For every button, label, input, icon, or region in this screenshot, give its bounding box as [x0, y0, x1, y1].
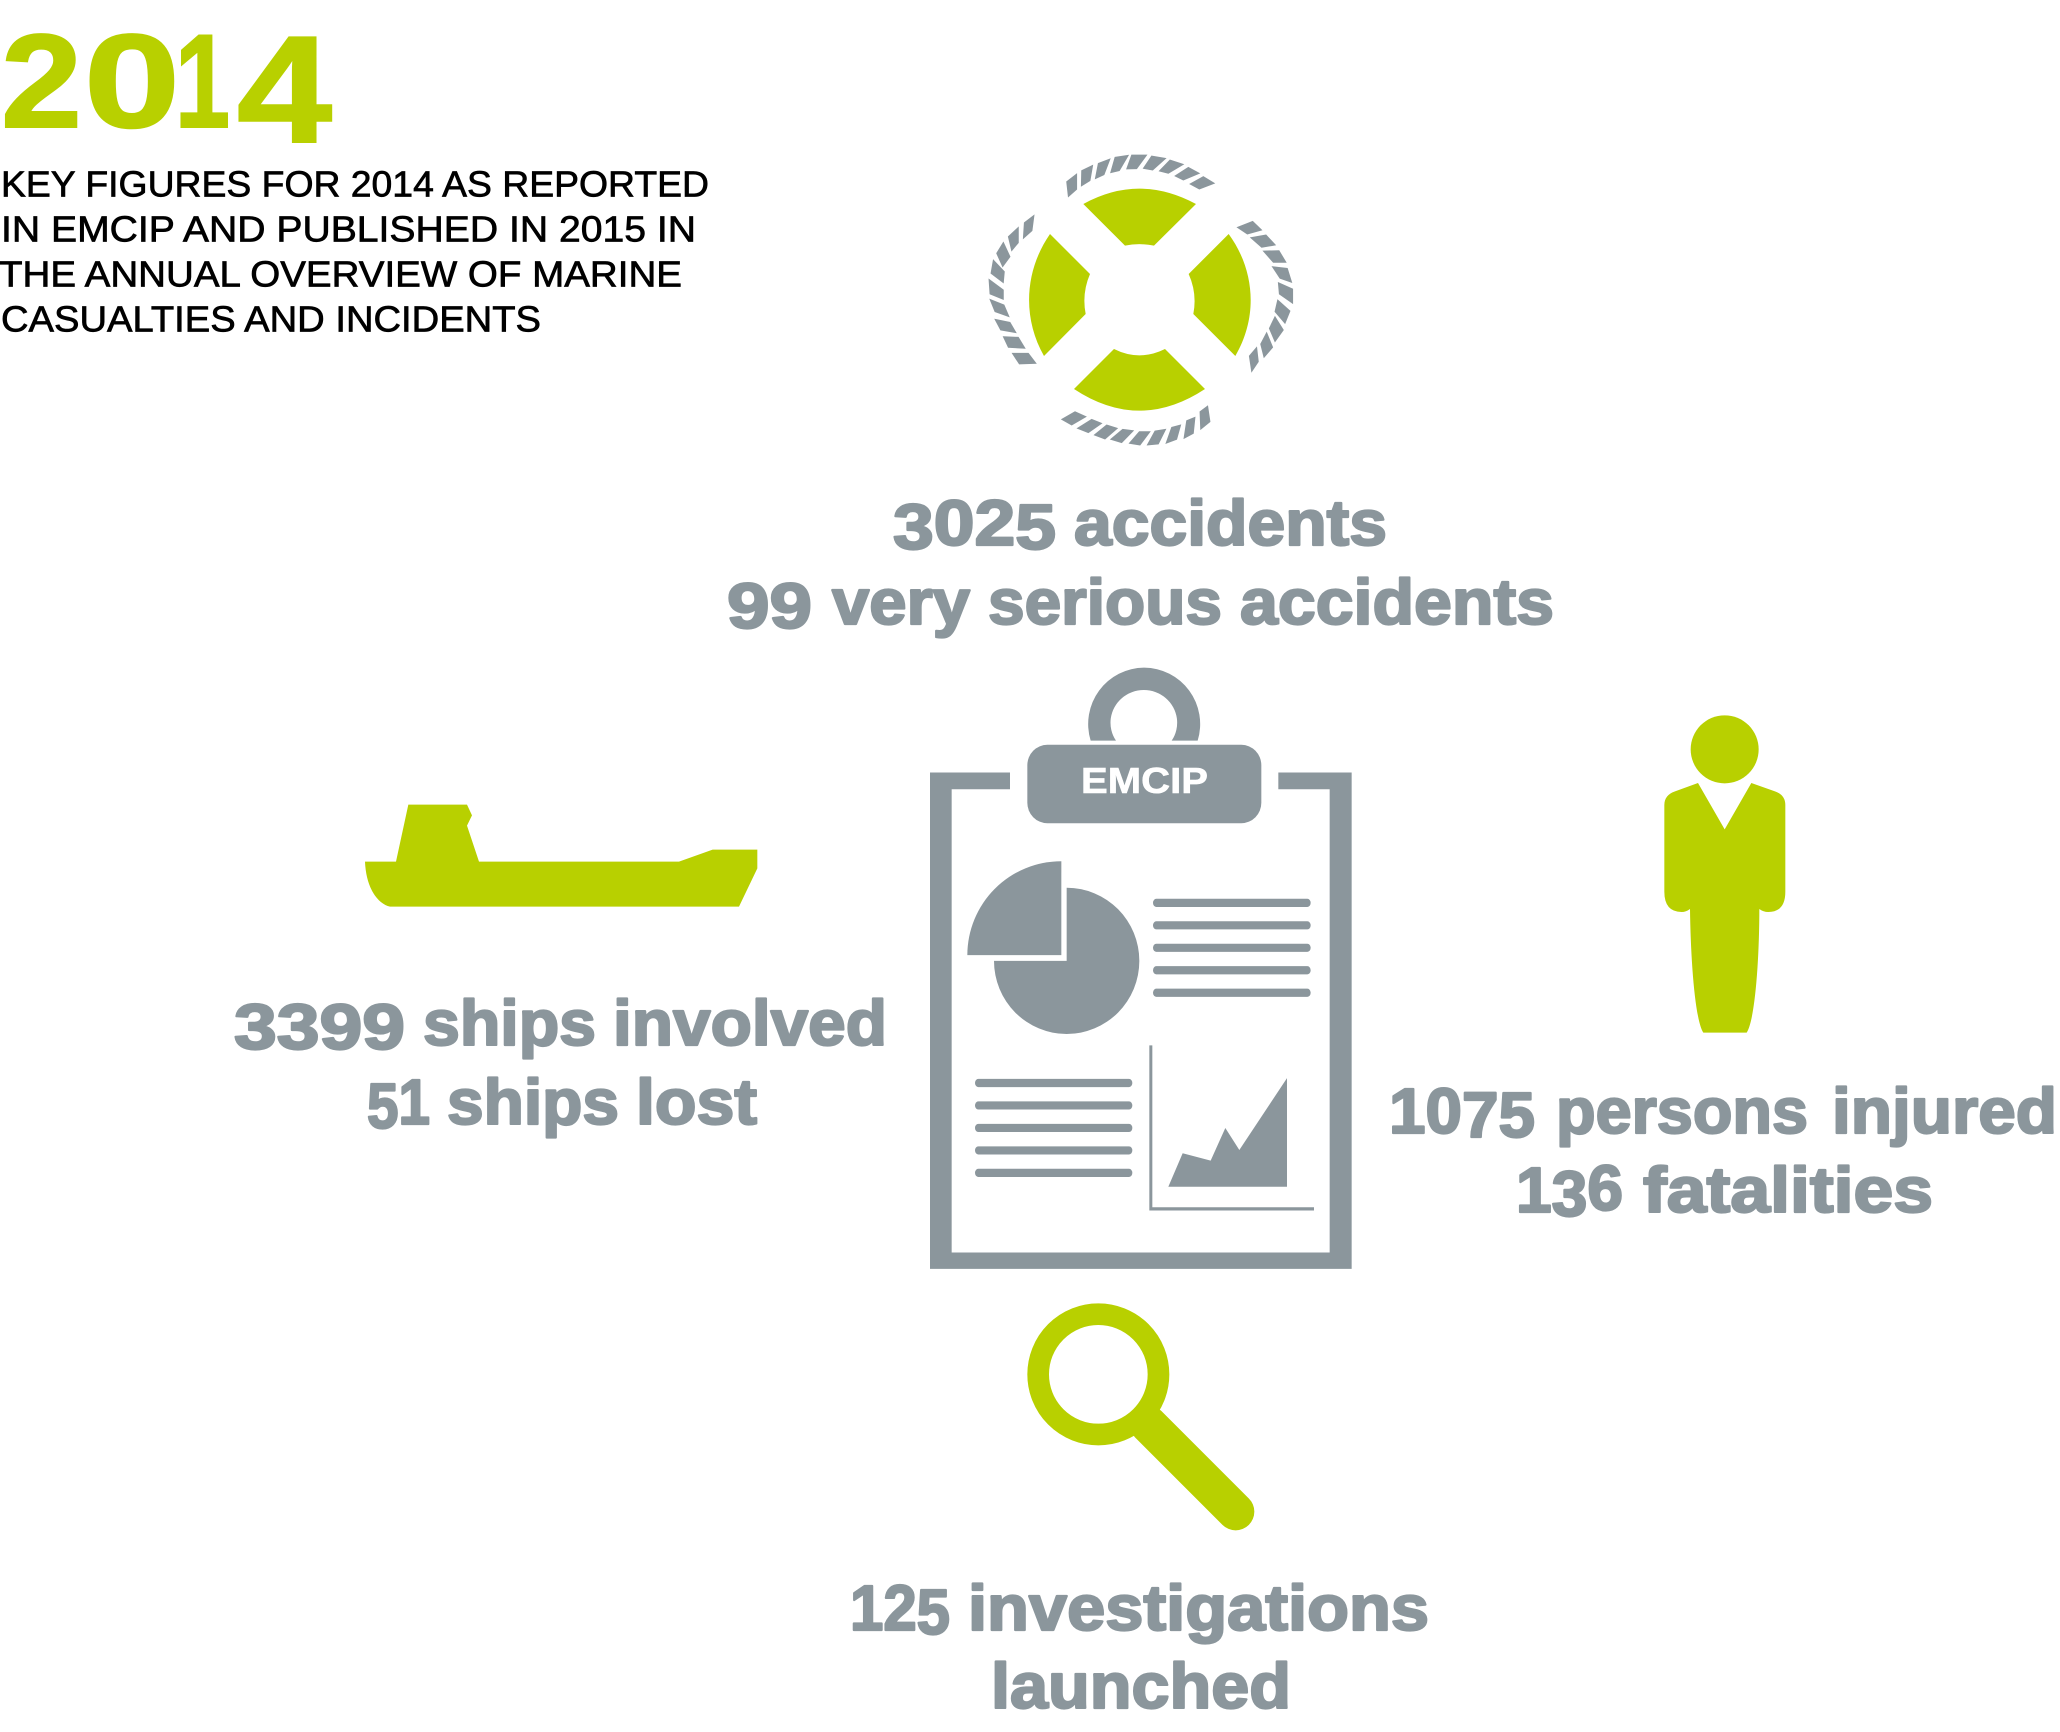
lifebuoy wedges	[1029, 189, 1251, 411]
label: accidents: accidents	[1240, 566, 1554, 638]
label: persons: persons	[1556, 1075, 1808, 1147]
label: accidents: very	[832, 566, 970, 638]
intro text block: IN EMCIP AND PUBLISHED IN 2015 IN	[1, 208, 696, 250]
label: accidents: serious	[988, 566, 1222, 638]
label: investigations: launched	[991, 1650, 1291, 1722]
label: investigations: investigations	[968, 1572, 1429, 1644]
label: ships: ships	[447, 1066, 619, 1138]
label: ships: lost	[636, 1066, 757, 1138]
icon: EMCIP clipboard report	[930, 668, 1352, 1269]
clip plate	[1027, 745, 1261, 823]
pie chart	[967, 861, 1139, 1034]
label: accidents: accidents	[1074, 487, 1387, 559]
icon: lifebuoy with rope	[989, 155, 1293, 445]
label: ships: 3399	[234, 991, 405, 1063]
label: ships: ships	[423, 987, 596, 1059]
label: persons	[1389, 1075, 2057, 1230]
title: 2014: 1	[175, 8, 230, 156]
label: ships	[234, 987, 887, 1142]
clip label: EMCIP	[1081, 760, 1208, 801]
text lines left	[975, 1079, 1132, 1177]
label: ships: 51	[367, 1066, 430, 1142]
label: accidents	[727, 487, 1554, 642]
label: ships: involved	[613, 987, 887, 1059]
intro text block: CASUALTIES AND INCIDENTS	[1, 298, 541, 340]
title: 2014: 2	[1, 8, 82, 156]
title: 2014	[1, 5, 332, 175]
label: persons: fatalities	[1643, 1154, 1933, 1226]
label: accidents: 3025	[893, 487, 1056, 563]
label: persons: injured	[1832, 1075, 2057, 1147]
intro text block: THE ANNUAL OVERVIEW OF MARINE	[0, 254, 682, 294]
clip ring	[1088, 668, 1200, 741]
label: investigations	[850, 1572, 1429, 1722]
rope segments	[989, 155, 1293, 445]
clipboard frame	[930, 773, 1352, 1269]
label: persons: 136	[1516, 1152, 1623, 1230]
icon: ship	[365, 805, 757, 907]
area chart	[1149, 1045, 1314, 1210]
text lines right	[1153, 899, 1311, 997]
icon: person	[1664, 715, 1785, 1033]
label: persons: 1075	[1389, 1075, 1535, 1151]
icon: magnifying glass	[1038, 1314, 1236, 1512]
title: 2014: 4	[237, 5, 332, 175]
intro text block: KEY FIGURES FOR 2014 AS REPORTED	[1, 164, 709, 204]
title: 2014: 0	[84, 8, 180, 156]
label: investigations: 125	[850, 1572, 950, 1648]
intro text block	[0, 164, 709, 340]
label: accidents: 99	[727, 570, 812, 642]
